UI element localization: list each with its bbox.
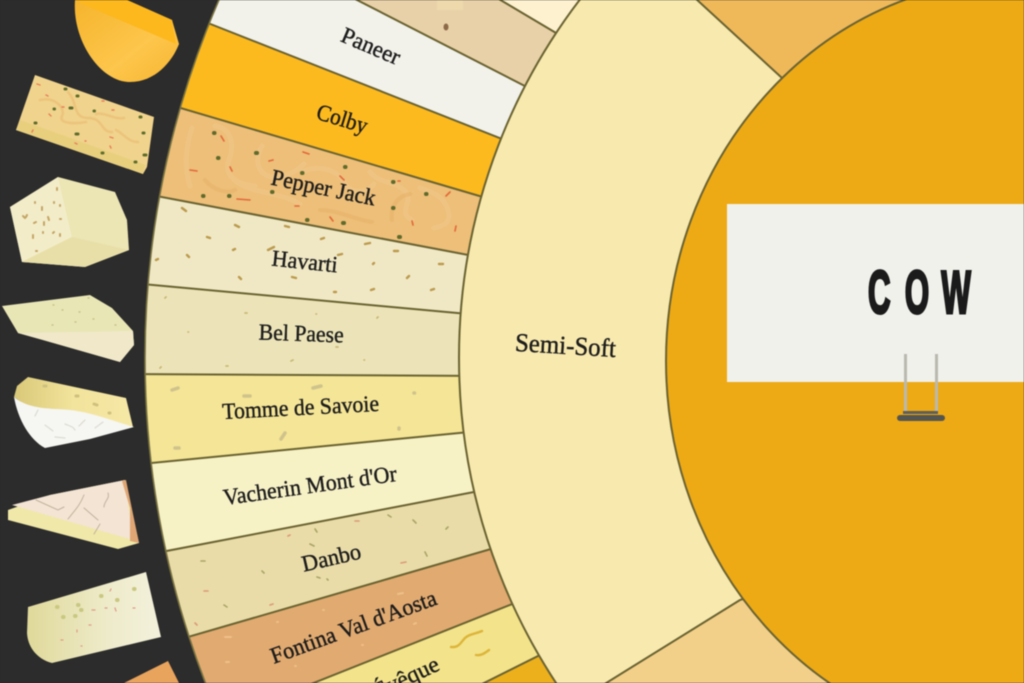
icon: Colby cheese wedge: [75, 0, 179, 82]
wedge: beige top: [359, 0, 556, 86]
wedge: Pont l'Eveque: [316, 604, 538, 683]
heading: COW: COW: [868, 260, 971, 327]
label: Bel Paese: Bel Paese: [258, 320, 344, 347]
label: Havarti: Havarti: [271, 246, 339, 277]
icon: cow pictogram stand: [897, 354, 945, 421]
middle ring: orange segment top: [695, 0, 1024, 300]
middle ring: Semi-Soft: [459, 0, 1024, 683]
middle ring: tan segment bottom: [603, 500, 1024, 683]
wedge: gold bottom: [486, 656, 556, 683]
wedge divider lines: [145, 0, 556, 683]
wedge: Tomme de Savoie: [145, 374, 464, 463]
wedge: Danbo: [166, 492, 490, 636]
label: Colby: Colby: [314, 99, 371, 139]
label: Tomme de Savoie: Tomme de Savoie: [222, 391, 380, 424]
centre circle: Cow: [666, 0, 1024, 683]
icon: Havarti cube: [10, 177, 129, 267]
icon: Danbo block: [27, 572, 161, 663]
wedge: Colby: [180, 24, 500, 196]
wedge: cream top: [502, 0, 579, 32]
wedge: Vacherin Mont d'Or: [151, 433, 474, 551]
wedge: Fontina Val d'Aosta: [190, 550, 512, 683]
wedge: Havarti: [148, 197, 468, 313]
label: Paneer: Paneer: [338, 22, 405, 70]
heading: Semi-Soft: Semi-Soft: [514, 328, 618, 363]
icon: Vacherin wedge: [8, 480, 139, 549]
icon: Bel Paese wedge: [2, 295, 134, 362]
label: Danbo: Danbo: [299, 539, 363, 577]
panel: Cow label box: [727, 204, 1024, 382]
outer ring: cheese varieties: [145, 0, 579, 683]
label: Pepper Jack: Pepper Jack: [269, 165, 378, 211]
wedge: Paneer: [210, 0, 524, 138]
wedge: Bel Paese: [145, 284, 460, 376]
label: Vacherin Mont d'Or: Vacherin Mont d'Or: [222, 461, 399, 510]
label: Fontina Val d'Aosta: Fontina Val d'Aosta: [267, 585, 440, 669]
icon: Tomme de Savoie wedge: [14, 377, 134, 448]
icon: Fontina wedge top: [120, 661, 180, 683]
icon: Pepper Jack block: [16, 75, 154, 174]
wedge: Pepper Jack: [160, 108, 481, 254]
